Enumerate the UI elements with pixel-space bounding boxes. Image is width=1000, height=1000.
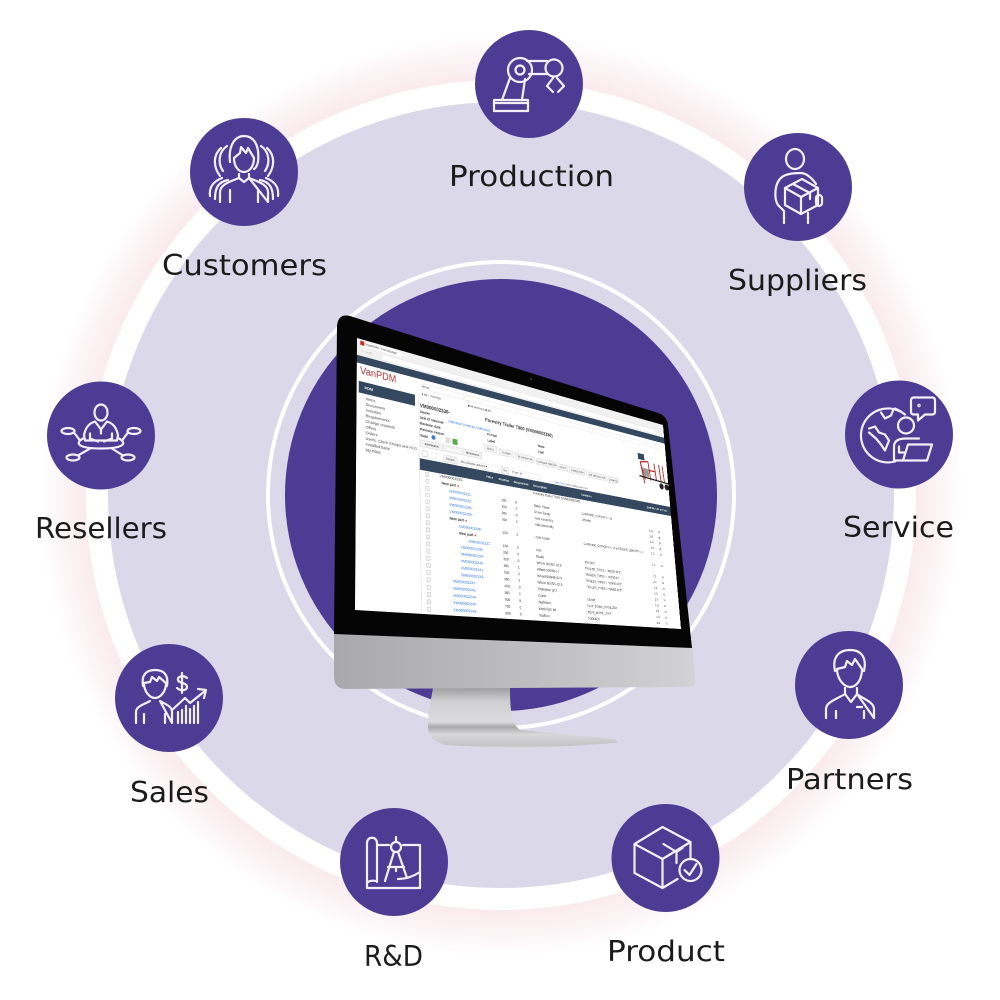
structure table rows: 100: [501, 498, 506, 503]
structure table rows: Wheel 500/55-17: [537, 567, 559, 574]
structure table rows: VM000002245-: [453, 608, 477, 614]
navigation bar: [357, 355, 665, 444]
node: Production: [475, 30, 583, 138]
sidebar: Change requests: [366, 419, 395, 430]
browser tab strip: VanPDM - Homepage: [366, 343, 397, 355]
monitor silver chin: [334, 632, 695, 689]
item title: VM000002330-: [420, 403, 450, 415]
structure table rows: 0: [519, 605, 521, 610]
structure table rows: 300: [504, 570, 509, 575]
structure table rows: VM000002239-: [461, 552, 484, 559]
structure table rows: Axle holder: [535, 535, 550, 541]
structure table rows: 1.0: [649, 529, 653, 533]
structure table rows: 0: [517, 552, 519, 557]
monitor screen: VanPDM application: Mass: [538, 444, 545, 449]
sidebar: Offers: [366, 425, 376, 432]
see more links: See more View Configurations ▾: [555, 480, 588, 490]
structure table rows: CRANE: [587, 597, 596, 602]
structure table rows: 0: [520, 612, 522, 617]
structure table rows: VM000002330-: [439, 474, 463, 483]
structure table rows: VM000002293-: [449, 502, 473, 511]
browser tab strip: [357, 338, 664, 438]
structure table rows: TRAILER_TYPES = "400/60-15.5": [585, 566, 621, 574]
structure table rows: VM000002238-: [460, 545, 484, 552]
structure table rows: 1.0: [651, 551, 654, 556]
structure table rows: VM000002243-: [461, 573, 484, 580]
structure table rows: VM000002237-: [468, 539, 491, 547]
structure table rows: 300: [503, 557, 509, 562]
sidebar: Requirements: [366, 413, 390, 424]
structure table rows: [425, 472, 668, 626]
structure table rows: 0: [518, 558, 519, 563]
table header: Description: [533, 484, 547, 490]
tabs row: Attributes: [425, 442, 439, 449]
structure table rows: 1: [518, 565, 520, 570]
structure table rows: 100: [502, 530, 508, 536]
icon: robot arm: [494, 58, 564, 111]
structure table rows: VM000002244-: [453, 593, 477, 600]
structure table rows: 3: [518, 578, 520, 583]
tabs row: Set Lifecycle ass: [589, 473, 605, 480]
monitor screen: VanPDM application: Label: [487, 438, 495, 444]
structure table rows: st: [662, 581, 664, 585]
node: Suppliers: [744, 133, 852, 241]
structure table rows: Crane: [538, 593, 546, 599]
structure table rows: 0: [516, 513, 518, 518]
icon: box with check mark: [634, 827, 702, 888]
structure table rows: Brake: [536, 554, 544, 560]
table header: [420, 458, 671, 516]
structure table rows: CARRYING_CAPACITY = 18: [582, 512, 612, 521]
sidebar: Users, Client Groups and ACG: [366, 436, 417, 451]
monitor screen: VanPDM application: Fuel: [538, 450, 544, 455]
monitor stand: [428, 688, 617, 749]
label: Partners: Partners: [786, 763, 913, 796]
structure table rows: 1.0: [656, 609, 659, 613]
structure table rows: New part ●: [441, 481, 459, 489]
structure table rows: VM000002240-: [461, 559, 484, 566]
structure table rows: REAR_WORK_LIGHT: [588, 610, 612, 616]
structure table rows: Axle assembly: [535, 522, 554, 529]
node: Sales: [115, 644, 223, 752]
structure table rows: TRAILER_TYPES = "500/55-17": [585, 573, 620, 580]
structure table rows: Work light kit: [539, 607, 556, 612]
structure table rows: FLAP_DOWN_STABILIZER: [587, 604, 617, 610]
tabs row: Menu: [487, 446, 494, 451]
monitor screen: VanPDM application: Owner: [420, 409, 430, 416]
structure table rows: New part ●: [449, 516, 467, 523]
structure table rows: st: [659, 541, 661, 546]
label: Service: Service: [843, 511, 954, 544]
structure table rows: Axle: [536, 548, 542, 553]
search button: [638, 453, 644, 460]
table header: Subposition: [514, 480, 528, 486]
structure table rows: 2: [518, 572, 520, 576]
structure table rows: VM000002246-: [453, 600, 477, 607]
structure table rows: 1.0: [652, 563, 655, 567]
tabs row: Configure HanCart: [537, 459, 557, 467]
label: Resellers: Resellers: [35, 512, 167, 545]
search row: Items: [422, 384, 429, 390]
table header: Condition: [581, 493, 592, 498]
node: Partners: [795, 631, 903, 739]
structure table rows: Wheel 400/60-15.5: [537, 561, 561, 568]
monitor screen: VanPDM application: Andersson (Andreas Andersson): [448, 419, 490, 433]
sidebar: Activities: [366, 408, 381, 416]
sidebar: Installed Base: [365, 442, 390, 452]
structure table rows: Sheet frame: [534, 510, 550, 517]
table header: Unit of meas: [655, 507, 667, 512]
structure table rows: VM000002295-: [449, 509, 473, 517]
VanPDM logo: VanPDM: [360, 365, 396, 385]
structure table rows: New part ●: [459, 531, 476, 538]
trailer drawing: [640, 460, 669, 491]
node: Resellers: [47, 382, 155, 490]
structure table rows: st: [658, 530, 660, 534]
structure table rows: 2.0: [655, 597, 658, 602]
structure table rows: VM000002242-: [453, 586, 477, 593]
monitor screen: VanPDM application: Unit of measure: [420, 415, 444, 425]
monitor camera: [530, 378, 532, 380]
structure table rows: st: [661, 564, 663, 568]
sidebar: Items: [366, 397, 375, 404]
table header: Position: [499, 477, 509, 483]
structure table rows: st: [662, 575, 664, 579]
structure table rows: Stabilizer: [538, 600, 551, 605]
structure table rows: 200: [502, 511, 507, 516]
node: R&D: [340, 808, 448, 916]
structure table rows: st: [660, 553, 662, 557]
structure table rows: 0: [517, 545, 519, 550]
structure table rows: 1.0: [650, 540, 654, 544]
structure table rows: 0: [519, 598, 521, 603]
structure table rows: 300: [504, 577, 510, 582]
label: Production: Production: [449, 160, 614, 193]
structure table rows: Wheeler: [582, 518, 591, 523]
tabs row: Structure: [447, 447, 459, 453]
label: Suppliers: Suppliers: [728, 264, 867, 297]
monitor black bezel: [334, 315, 692, 648]
structure table rows: 1.0: [650, 546, 654, 550]
item heading: Forestry Trailer T800 (VM000002330): [485, 417, 553, 438]
tabs row: [420, 440, 619, 484]
structure table rows: st: [664, 604, 666, 608]
structure table rows: 1.0: [653, 574, 656, 579]
structure table rows: 0: [516, 519, 518, 524]
search row: ● All ○ Full text: [422, 392, 441, 400]
tabs row: Configuration: [571, 468, 585, 474]
structure table rows: Basic frame: [534, 503, 549, 510]
structure table rows: Toolbox: [539, 613, 550, 618]
structure table rows: 0: [515, 507, 517, 511]
sidebar: Documents: [366, 402, 385, 411]
structure table rows: st: [663, 598, 666, 602]
table header: Filter: [486, 475, 493, 480]
tabs row: Oders: [560, 465, 566, 470]
label: Sales: Sales: [130, 776, 209, 809]
structure table rows: 1.0: [655, 603, 659, 608]
structure table rows: 1.0: [649, 534, 653, 539]
toolbar row: No possible actions ▾: [461, 460, 487, 469]
structure table rows: TOOLBOX: [588, 616, 600, 621]
label: Customers: Customers: [162, 249, 327, 282]
node: Service: [845, 380, 953, 488]
structure table rows: Wheel 600/55-22.5: [537, 580, 563, 587]
monitor screen: VanPDM application: [355, 338, 681, 629]
structure table rows: VM000002232-: [449, 496, 472, 504]
structure table rows: 0: [519, 585, 521, 590]
structure table rows: 1.0: [657, 621, 660, 625]
structure table rows: VM000002241-: [461, 566, 484, 573]
structure table rows: 200: [503, 550, 508, 555]
icon: partner person: [826, 650, 874, 718]
tabs row: Event log: [609, 478, 618, 483]
sidebar header: [359, 381, 415, 406]
structure table rows: BRAKES: [585, 560, 595, 565]
search row: [422, 384, 661, 450]
structure table rows: 0: [516, 532, 518, 537]
structure table rows: Axle assembly: [534, 516, 553, 523]
toolbar row: Go: [503, 468, 507, 472]
structure table rows: st: [663, 592, 665, 597]
structure table rows: TRAILER_TYPES = "500/45-22.5": [586, 579, 622, 586]
structure table rows: VM000002296-: [459, 524, 482, 532]
structure table rows: 2.0: [653, 580, 657, 584]
node: Customers: [190, 118, 298, 226]
icon: globe with support agent: [861, 398, 935, 462]
structure table rows: 300: [502, 517, 507, 523]
icon: group of people: [210, 136, 278, 202]
browser tab strip: ← → C: [361, 349, 372, 355]
sidebar header: PDM: [365, 386, 373, 392]
monitor screen: VanPDM application: Revision date: [420, 421, 441, 430]
table header: Quantity: [647, 505, 655, 510]
structure table rows: st: [659, 547, 661, 551]
monitor screen: VanPDM application: State: [420, 433, 428, 439]
structure table rows: 700: [505, 604, 511, 609]
structure table rows: 0: [515, 500, 517, 505]
structure table rows: st: [663, 587, 665, 591]
structure table rows: 800: [505, 611, 511, 616]
structure table rows: CARRYING_CAPACITY >= 14 & TRAILER_LENGTH >= 3: [583, 542, 643, 554]
structure table rows: st: [664, 610, 667, 614]
structure table rows: VM000002247-: [453, 579, 477, 586]
sidebar: [355, 379, 422, 614]
label: R&D: R&D: [364, 940, 423, 973]
structure table rows: st: [665, 616, 667, 620]
toolbar row: From: all: [512, 470, 522, 475]
structure table rows: 600: [505, 597, 510, 602]
structure table rows: 2.0: [654, 586, 657, 590]
structure table rows: Forestry Trailer T800 (VM000002330): [533, 491, 581, 504]
structure table rows: st: [665, 622, 668, 626]
icon: person carrying box: [775, 149, 822, 223]
toolbar row: [422, 450, 541, 480]
search row: ■ All revisions ■ All: [468, 404, 491, 413]
structure table rows: 0: [519, 592, 521, 596]
label: Product: Product: [607, 935, 725, 968]
structure table rows: Wheel 500/45-22.5: [537, 574, 562, 581]
monitor screen: VanPDM application: Format: [487, 432, 497, 438]
structure table rows: Protective grid: [538, 587, 557, 593]
structure table rows: st: [658, 536, 660, 540]
monitor screen: VanPDM application: Revision reason: [420, 427, 444, 436]
node: Product: [612, 804, 720, 912]
tabs row: To state: [502, 450, 511, 456]
icon: seated person with network: [62, 404, 140, 460]
sidebar: Orders: [366, 430, 378, 438]
structure table rows: 500: [504, 590, 510, 596]
structure table rows: 100: [501, 504, 507, 510]
toolbar row: Detach: [446, 457, 455, 462]
structure table rows: TRAILER_TYPES = "600/55-22.5": [586, 585, 622, 592]
structure table rows: 400: [504, 584, 510, 589]
tabs row: Revisions: [466, 451, 479, 457]
sidebar: My PDM: [365, 448, 381, 455]
structure table rows: VM000002311-: [449, 489, 472, 497]
icon: blueprint and compass: [367, 837, 420, 888]
icon: salesperson with rising chart: [136, 670, 206, 723]
structure table rows: 2.0: [654, 592, 658, 596]
tabs row: To convert as: [517, 455, 532, 461]
structure table rows: 300: [503, 563, 509, 569]
structure table rows: 100: [503, 544, 508, 549]
structure table rows: 4.0: [656, 615, 660, 619]
